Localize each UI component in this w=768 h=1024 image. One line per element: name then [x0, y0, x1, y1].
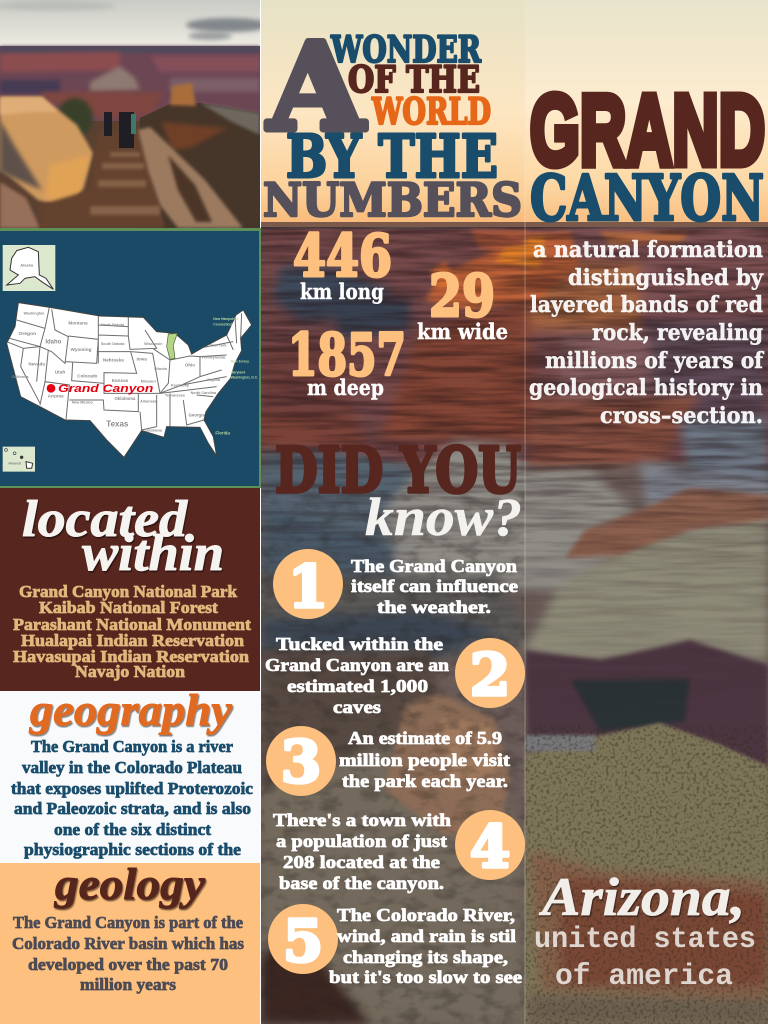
stat: width: 29 — [429, 262, 495, 330]
top-left photo: hikers on canyon trail — [0, 0, 270, 228]
state labels: Kansas — [112, 378, 129, 383]
fact 3: 3 — [281, 728, 321, 796]
state labels: North Carolina — [191, 391, 217, 395]
state labels: Arkansas — [140, 400, 157, 404]
marker: grand canyon: Grand Canyon — [58, 383, 154, 395]
us map: Connecticut — [213, 323, 233, 327]
state labels: Montana — [68, 320, 88, 325]
state labels: Washington — [24, 312, 44, 316]
state labels: North Dakota — [101, 323, 125, 327]
geology text: The Grand Canyon is part of the — [13, 913, 243, 932]
big letter A: A — [267, 17, 366, 158]
fact 4: 208 located at the — [283, 852, 440, 872]
state labels: Louisiana — [145, 429, 163, 433]
state labels: Kentucky — [171, 383, 190, 388]
fact 4: 4 — [470, 813, 510, 881]
state labels: Nebraska — [103, 357, 124, 362]
location label: arizona, united states of america: united states — [534, 923, 756, 957]
fact 2: caves — [333, 697, 381, 717]
heading: geology: geology — [54, 860, 205, 909]
geography text: one of the six distinct — [54, 820, 212, 839]
fact 1: The Grand Canyon — [351, 556, 517, 576]
list of lands: Parashant National Monument — [13, 615, 251, 634]
stat: length: 446 — [293, 222, 392, 290]
list of lands — [13, 582, 251, 681]
list of lands: Grand Canyon National Park — [19, 582, 238, 601]
geography text — [11, 737, 253, 859]
fact 1 — [273, 549, 518, 621]
state labels: Oregon — [18, 331, 36, 337]
fact 2: estimated 1,000 — [287, 676, 428, 696]
fact 1: 1 — [288, 553, 328, 621]
location label: arizona, united states of america — [534, 867, 756, 994]
fact 4 — [273, 810, 525, 893]
geography text: valley in the Colorado Plateau — [22, 758, 242, 777]
fact 1: itself can influence — [351, 576, 518, 596]
state labels: New Mexico — [72, 400, 94, 404]
description text: cross–section. — [600, 403, 763, 429]
panel: location map — [0, 228, 261, 488]
fact 4: base of the canyon. — [279, 873, 444, 893]
fact 2 — [265, 634, 525, 717]
geography text: physiographic sections of the — [24, 840, 241, 859]
description text: distinguished by — [568, 265, 764, 291]
state labels: Colorado — [77, 373, 98, 378]
fact 5: 5 — [283, 907, 323, 975]
state labels: Oklahoma — [115, 396, 136, 401]
geology text: developed over the past 70 — [28, 955, 228, 974]
inset: alaska — [3, 245, 55, 291]
fact 2: Tucked within the — [276, 634, 443, 654]
state labels: Utah — [55, 370, 65, 375]
fact 5: changing its shape, — [343, 947, 508, 967]
description text — [529, 237, 764, 429]
us map: New Jersey — [231, 359, 249, 363]
state labels: Wyoming — [71, 347, 92, 352]
heading: located within: within — [82, 525, 224, 582]
state labels: Pennsylvania — [202, 355, 226, 359]
state labels: Illinois — [154, 366, 168, 371]
heading: geography: geography — [29, 686, 232, 735]
panel: geography — [0, 686, 260, 863]
panel seam — [524, 0, 526, 1024]
numbers: NUMBERS — [263, 173, 522, 227]
heading: did you know — [275, 433, 522, 547]
state labels: Texas — [106, 420, 129, 429]
right background photo: canyon landscape — [261, 222, 768, 1024]
fact 2: Grand Canyon are an — [265, 655, 449, 675]
list of lands: Navajo Nation — [75, 662, 186, 681]
state labels: Tennessee — [165, 393, 186, 398]
list of lands: Kaibab National Forest — [39, 598, 218, 617]
us map: Florida — [215, 430, 230, 435]
state labels: Iowa — [136, 357, 147, 362]
state labels: South Dakota — [101, 342, 125, 346]
state labels: Virginia — [207, 378, 221, 382]
list of lands: Hualapai Indian Reservation — [21, 631, 245, 650]
heading: located within — [22, 491, 224, 582]
panel: geology — [0, 860, 260, 1024]
state labels: Wisconsin — [144, 342, 162, 346]
stat: depth: m deep — [307, 375, 384, 400]
fact 5: but it's too slow to see — [329, 967, 522, 987]
stat: depth — [288, 321, 406, 400]
location label: arizona, united states of america: Arizona, — [539, 867, 745, 927]
fact 2: 2 — [470, 641, 510, 709]
geology text: Colorado River basin which has — [12, 934, 245, 953]
state labels: Ohio — [185, 363, 195, 368]
wonder: WONDER — [330, 29, 482, 71]
fact 5: wind, and rain is stil — [337, 926, 516, 946]
fact 5 — [268, 904, 522, 987]
heading: did you know: DID YOU — [275, 433, 521, 507]
geology text — [12, 913, 245, 994]
us map: Maryland — [231, 370, 245, 374]
fact 5: The Colorado River, — [337, 905, 515, 925]
stat: length: km long — [300, 279, 384, 304]
heading: located within: located — [22, 491, 188, 548]
geography text: The Grand Canyon is a river — [31, 737, 233, 756]
stat: width: km wide — [417, 319, 508, 344]
by the: BY THE — [286, 122, 498, 191]
heading: did you know: know? — [365, 487, 522, 547]
state labels — [12, 312, 227, 433]
state labels: Nevada — [28, 362, 45, 367]
geography text: and Paleozoic strata, and is also — [14, 799, 251, 818]
state labels: New York — [210, 344, 227, 348]
us map: Washington, D.C. — [231, 376, 258, 380]
state labels: Idaho — [45, 339, 62, 345]
geography text: that exposes uplifted Proterozoic — [11, 779, 253, 798]
fact 3: An estimate of 5.9 — [348, 728, 502, 748]
inset: alaska: Alaska — [20, 262, 34, 267]
fact 3 — [266, 726, 510, 796]
fact 3: the park each year. — [342, 771, 508, 791]
geology text: million years — [80, 975, 177, 994]
state labels: Arizona — [48, 394, 64, 399]
inset: hawaii: Hawaii — [8, 460, 21, 465]
title: grand canyon — [530, 74, 765, 235]
horizon strip — [261, 222, 768, 227]
title: a wonder of the world by the numbers — [263, 17, 522, 227]
location label: arizona, united states of america: of america — [555, 960, 733, 994]
list of lands: Havasupai Indian Reservation — [13, 647, 250, 666]
state labels: Georgia — [188, 413, 205, 418]
world: WORLD — [371, 91, 491, 133]
us map — [7, 303, 258, 457]
panel: located within — [0, 488, 260, 691]
stat: depth: 1857 — [288, 321, 406, 389]
fact 3: million people visit — [339, 750, 510, 770]
fact 1: the weather. — [377, 597, 491, 617]
fact 4: There's a town with — [273, 810, 451, 830]
header background: sunset sky — [261, 0, 768, 226]
stat: length — [293, 222, 392, 304]
state labels: Missouri — [141, 379, 156, 383]
state labels: California — [12, 375, 29, 379]
fact 4: a population of just — [276, 831, 447, 851]
of the: OF THE — [348, 59, 480, 101]
lake michigan highlight — [167, 333, 177, 359]
us map: New Hampshire — [213, 317, 238, 321]
inset: hawaii — [3, 447, 35, 472]
